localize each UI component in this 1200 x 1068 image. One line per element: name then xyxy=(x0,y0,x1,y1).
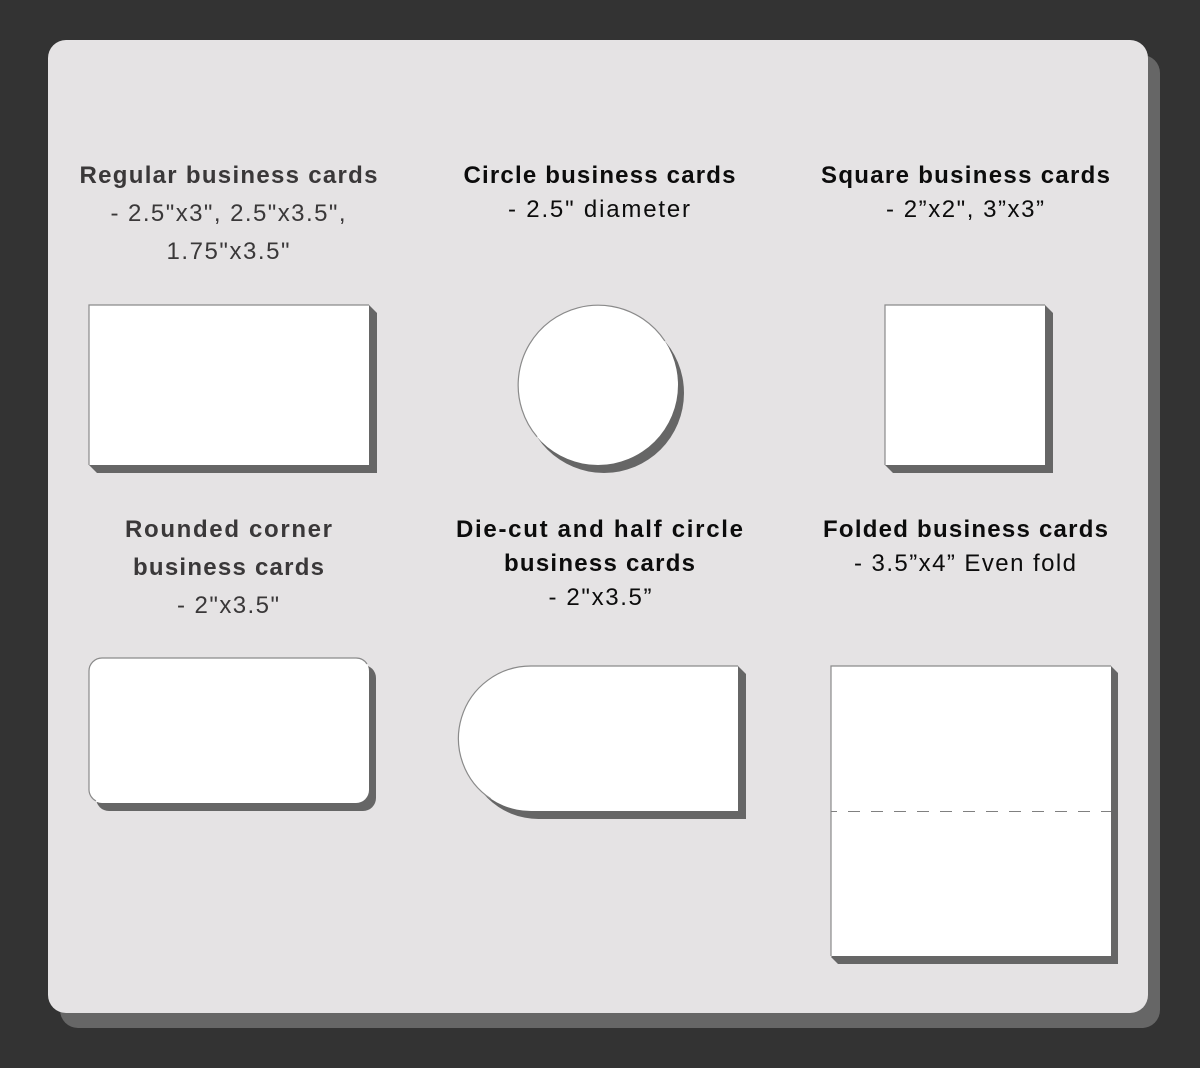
heading: square business cards: Square business cards xyxy=(821,162,1110,189)
heading: circle business cards: Circle business cards xyxy=(464,162,736,189)
heading: die-cut and half circle business cards: business cards xyxy=(504,550,695,577)
heading: regular business cards: 1.75"x3.5" xyxy=(166,238,290,265)
heading: die-cut and half circle business cards: Die-cut and half circle xyxy=(456,516,743,543)
heading: square business cards xyxy=(821,162,1110,223)
heading: rounded corner business cards: - 2"x3.5" xyxy=(177,592,279,619)
heading: circle business cards xyxy=(464,162,736,223)
card: folded with fold line xyxy=(831,666,1118,964)
card: square xyxy=(885,305,1053,473)
heading: die-cut and half circle business cards xyxy=(456,516,743,611)
heading: folded business cards: - 3.5”x4” Even fold xyxy=(854,550,1076,577)
card: regular xyxy=(89,305,377,473)
heading: rounded corner business cards: Rounded corner xyxy=(125,516,332,543)
heading: folded business cards xyxy=(823,516,1108,577)
heading: folded business cards: Folded business cards xyxy=(823,516,1108,543)
heading: rounded corner business cards: business cards xyxy=(133,554,324,581)
heading: die-cut and half circle business cards: - 2"x3.5” xyxy=(548,584,652,611)
heading: rounded corner business cards xyxy=(125,516,332,619)
card: rounded corner xyxy=(89,658,376,811)
heading: regular business cards xyxy=(80,162,378,265)
heading: regular business cards: - 2.5"x3", 2.5"x3.5", xyxy=(110,200,346,227)
card: circle xyxy=(518,305,684,473)
heading: square business cards: - 2”x2", 3”x3” xyxy=(886,196,1044,223)
heading: circle business cards: - 2.5" diameter xyxy=(508,196,690,223)
card: half circle die-cut xyxy=(458,666,746,819)
heading: regular business cards: Regular business cards xyxy=(80,162,378,189)
